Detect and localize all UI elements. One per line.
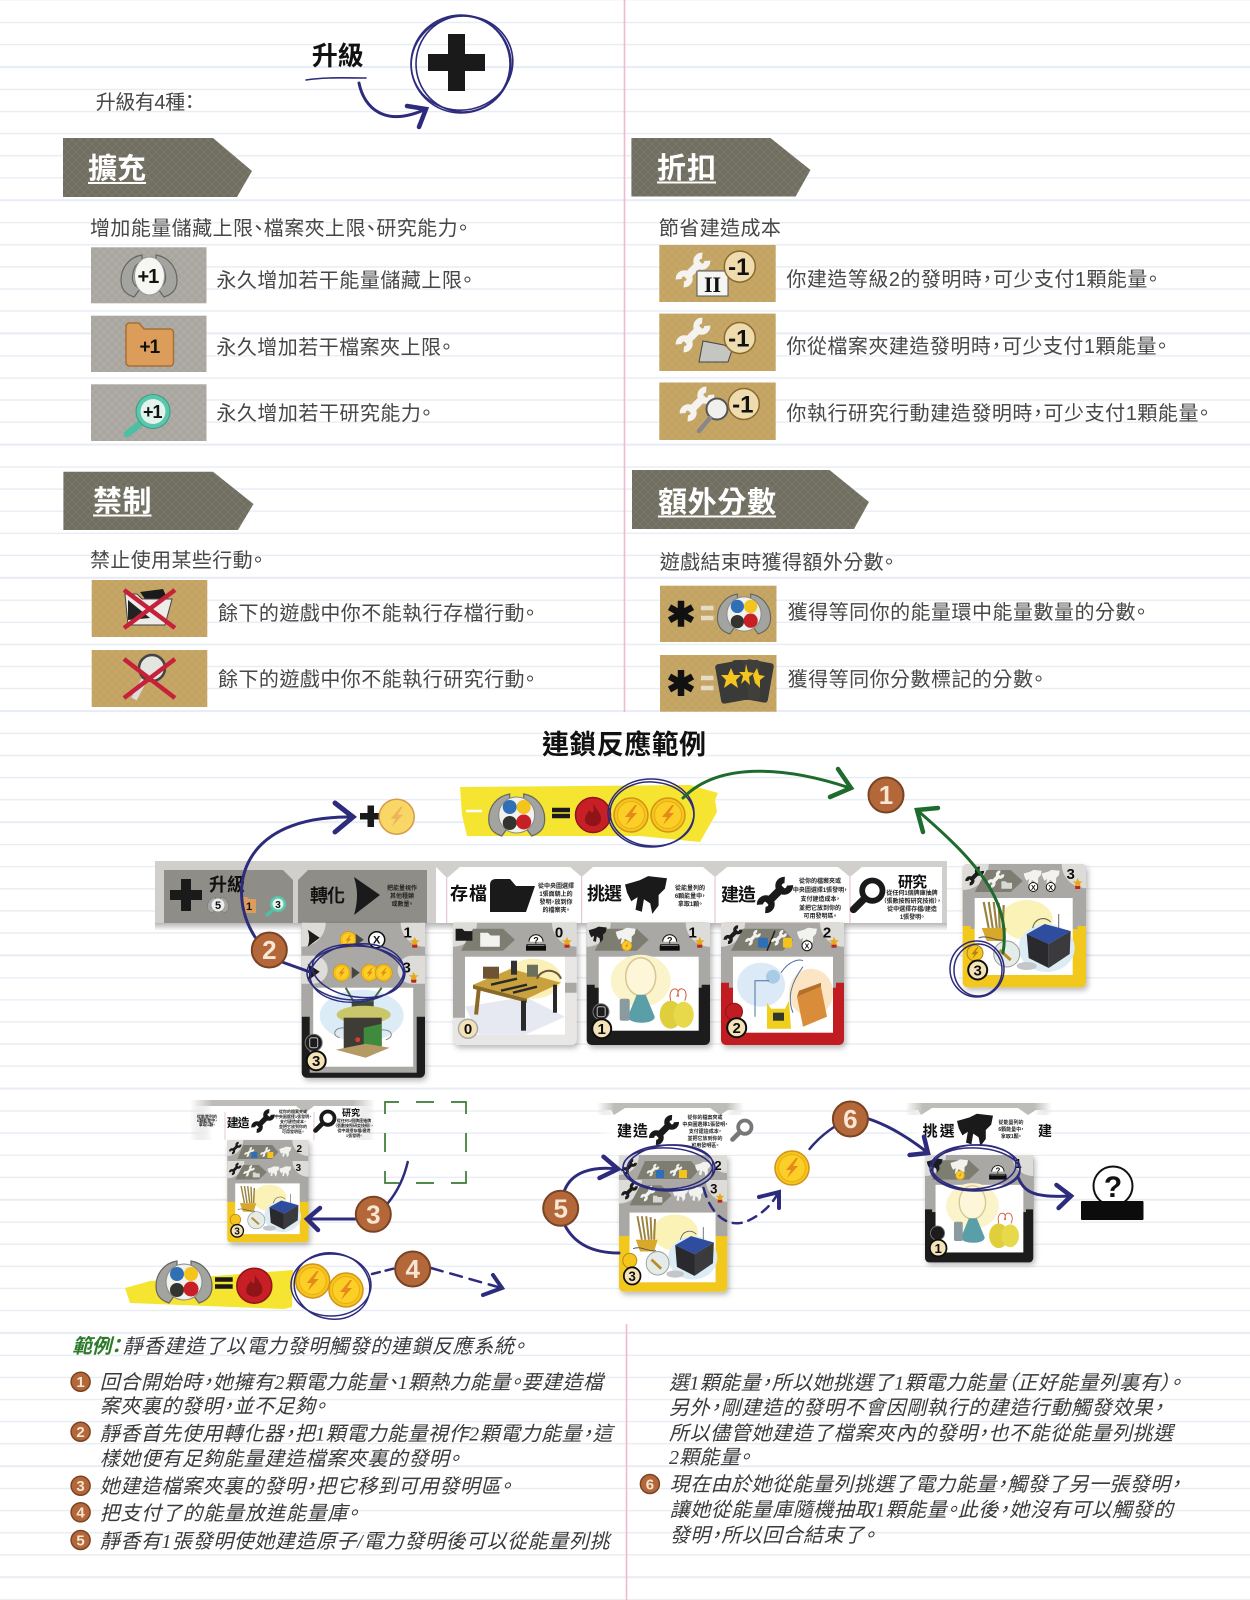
heading banner: 折扣: 折扣 [657, 152, 716, 185]
mini action strip: 挑選: 6顆能量中， [998, 1126, 1024, 1133]
heading banner: 禁制: 禁制 [93, 485, 152, 518]
icon: archive +1 [91, 316, 206, 372]
icon: research +1: +1 [143, 402, 163, 422]
action: 升級: 5 [215, 900, 221, 912]
example text: left column [71, 1335, 616, 1553]
card: bulb: 1 [689, 925, 697, 942]
card: yellow invention (right) [963, 864, 1086, 987]
page margin line (top) [624, 0, 626, 712]
step 6: 讓她從能量庫隨機抽取1顆能量。此後，她沒有可以觸發的 [670, 1500, 1175, 1522]
picked electric coin [775, 1151, 809, 1185]
mini action strip: 建造: 建造 [617, 1122, 648, 1140]
hand-drawn circle on pick row [930, 1142, 1021, 1192]
electric energy coins [614, 798, 685, 832]
mini action strip: 建造: 並把它放到你的 [687, 1135, 723, 1142]
step 3: 3 [76, 1478, 85, 1495]
description: 節省建造成本 [659, 217, 781, 240]
card: heat invention: X [805, 944, 810, 951]
icon: random energy from bank [1081, 1166, 1144, 1220]
icon: archive +1: +1 [140, 337, 161, 358]
action: 研究: 1張發明。 [900, 913, 924, 921]
spent electric coins [296, 1264, 363, 1307]
mini card stack [227, 1140, 308, 1242]
number 6 coin with arrows: 6 [843, 1104, 858, 1134]
white action panels [436, 867, 942, 923]
step 6: 現在由於她從能量列挑選了電力能量，觸發了另一張發明， [670, 1474, 1181, 1496]
step 5: 5 [76, 1532, 85, 1550]
mini action strip: 挑選: 拿取1顆。 [1001, 1133, 1021, 1140]
text: energy ring bonus: 獲得等同你的能量環中能量數量的分數。 [788, 601, 1146, 624]
build row of card: 2 [714, 1158, 722, 1173]
panel: 額外分數 [632, 470, 1146, 712]
card: heat invention [721, 923, 844, 1045]
text: level 2 discount: 你建造等級2的發明時，可少支付1顆能量。 [786, 268, 1158, 291]
action: 建造: 中央圖選擇1張發明， [793, 886, 847, 894]
text: research discount: 你執行研究行動建造發明時，可少支付1顆能量。 [786, 402, 1209, 425]
intro line: 範例： [72, 1335, 122, 1358]
action: 建造: 從你的檔案夾或 [799, 877, 841, 885]
action: 研究: 研究 [898, 873, 927, 891]
action: 挑選: 6顆能量中， [675, 892, 705, 900]
yellow highlight with energy ring: after payment [125, 1246, 376, 1326]
description: 禁止使用某些行動。 [90, 549, 263, 572]
equals sign [552, 810, 570, 816]
mini action strip: 建造 研究: 拿取1顆。 [199, 1121, 215, 1127]
heading banner: 折扣 [631, 138, 810, 196]
green arrow: card cost to step 1 [917, 808, 1004, 953]
stacked cards with build row [619, 1155, 727, 1292]
hand-drawn circle on build row [622, 1142, 715, 1192]
action: 轉化: 或數量。 [391, 900, 413, 908]
mini action strip: 建造 研究: 並把它放到你的 [279, 1123, 307, 1129]
step 2: 2 [76, 1424, 85, 1441]
number 3 coin with arrows [307, 1162, 408, 1232]
icon: black plus [428, 34, 485, 91]
icon: archive discount: -1 [728, 326, 749, 352]
action: 挑選: 挑選 [587, 884, 622, 904]
number 2 coin with pointer: 2 [262, 935, 277, 965]
icon: energy storage +1: +1 [138, 266, 159, 288]
page margin line (bottom) [626, 1324, 628, 1600]
card: bulb [587, 923, 710, 1045]
mini action strip: 建造 研究: 研究 [342, 1107, 360, 1118]
mini action strip: 建造 研究: 從能量列的 [197, 1113, 217, 1119]
step 5 continued: 所以儘管她建造了檔案夾內的發明，也不能從能量列挑選 [669, 1423, 1176, 1445]
number 5 coin with arrows [543, 1157, 619, 1253]
heading: 升級: 升級 [312, 41, 364, 71]
yellow card with free-pick [619, 1180, 727, 1292]
action: 建造 [721, 877, 847, 920]
card: workbench [453, 923, 577, 1045]
text: banned archive: 餘下的遊戲中你不能執行存檔行動。 [218, 602, 535, 625]
number 6 coin with arrows [810, 1102, 928, 1155]
number 3 coin with arrows: 3 [366, 1200, 381, 1230]
mini action strip: 建造 研究: 建造 [227, 1115, 250, 1130]
number 1 coin [868, 778, 904, 812]
icon: archive discount [659, 314, 776, 371]
card: yellow invention (right): 3 [974, 962, 982, 980]
step 6 [640, 1474, 1181, 1547]
number 1 coin: 1 [879, 780, 893, 810]
mini yellow card [227, 1161, 308, 1242]
dashed green placeholder [385, 1102, 466, 1183]
step 4: 4 [76, 1504, 85, 1522]
panel: 擴充 [63, 138, 472, 441]
step 5 continued: 選1顆能量，所以她挑選了1顆電力能量（正好能量列裏有）。 [669, 1372, 1182, 1394]
icon: energy ring bonus [660, 586, 776, 642]
number 4 coin with dashed arrow [372, 1252, 502, 1295]
action: 研究 [854, 873, 941, 921]
text: banned research: 餘下的遊戲中你不能執行研究行動。 [218, 668, 535, 691]
mini action strip: 建造: 中央圖選擇1張發明， [682, 1121, 728, 1128]
step 2: 靜香首先使用轉化器，把1顆電力能量視作2顆電力能量，這 [100, 1422, 616, 1446]
step 6: 發明，所以回合結束了。 [670, 1525, 876, 1547]
action: 挑選 [587, 876, 705, 914]
card: heat invention: 2 [823, 925, 831, 942]
card: converter stack [302, 923, 425, 1078]
mini action strip: 建造 [597, 1103, 752, 1155]
step 5 continued [669, 1372, 1182, 1469]
step 5 continued: 另外，剛建造的發明不會因剛執行的建造行動觸發效果， [669, 1398, 1163, 1420]
step 4: 把支付了的能量放進能量庫。 [100, 1503, 359, 1525]
mini action strip: 建造: 可用發明區。 [691, 1142, 719, 1149]
action: 轉化: 把能量視作 [387, 884, 417, 892]
step 2 [71, 1422, 616, 1470]
panel: 折扣 [631, 138, 1209, 440]
mini card top row: 2 [297, 1144, 303, 1155]
action: 升級: 3 [275, 900, 281, 911]
hand-drawn circle on card cost [950, 941, 1004, 997]
icon: level 2 discount: II [704, 272, 721, 297]
step 1 [71, 1372, 606, 1418]
bulb card with pick row: 1 [935, 1241, 942, 1256]
step 3: 她建造檔案夾裏的發明，把它移到可用發明區。 [100, 1476, 512, 1498]
example text: right column [640, 1372, 1182, 1547]
heat energy coin [576, 798, 610, 832]
action: 研究: 從任何1個牌庫抽牌 [886, 889, 938, 897]
mini action strip: 建造 研究: 6顆能量中， [197, 1117, 217, 1123]
step 5: 靜香有1張發明使她建造原子/電力發明後可以從能量列挑 [100, 1531, 613, 1553]
text: research: 永久增加若干研究能力。 [216, 402, 431, 425]
description: 增加能量儲藏上限、檔案夾上限、研究能力。 [90, 217, 468, 240]
action: 建造: 建造 [721, 885, 756, 905]
text: energy storage: 永久增加若干能量儲藏上限。 [216, 269, 472, 292]
bulb card with pick row: 1 [1014, 1156, 1022, 1171]
card: yellow invention (right): X [1048, 885, 1053, 892]
hand-drawn circle around coins [608, 779, 696, 849]
mini action strip: 建造 研究: 從任何1個牌庫抽牌 [337, 1117, 371, 1123]
action board strip [155, 861, 947, 931]
action: 轉化: 其他種類 [390, 892, 414, 900]
hand-drawn circle around plus [402, 6, 522, 120]
action: 研究: （張數按照研究技術）， [883, 897, 941, 905]
step 1: 回合開始時，她擁有2顆電力能量、1顆熱力能量。要建造檔 [100, 1372, 606, 1394]
mini yellow card: 3 [296, 1163, 302, 1174]
text: archive discount: 你從檔案夾建造發明時，可少支付1顆能量。 [786, 335, 1167, 358]
number 4 coin with dashed arrow: 4 [405, 1254, 420, 1284]
icon: banned research [92, 650, 207, 707]
intro text: 升級有4種： [96, 91, 195, 114]
icon: research discount: -1 [732, 392, 753, 418]
mini action strip: 建造: 支付建造成本， [689, 1128, 721, 1135]
card: workbench: 0 [555, 925, 563, 942]
mini action strip: 建造: 從你的檔案夾或 [687, 1114, 723, 1121]
step 1: 案夾裏的發明，並不足夠。 [100, 1396, 326, 1418]
yellow card with free-pick: 3 [629, 1269, 636, 1284]
card: yellow invention (right): 3 [1067, 866, 1075, 883]
number 5 coin with arrows: 5 [553, 1194, 568, 1224]
bulb card with pick row [925, 1155, 1033, 1262]
action: 存檔: 1張面朝上的 [539, 890, 573, 898]
action: 建造: 可用發明區。 [803, 912, 837, 920]
card: converter stack: 1 [404, 925, 412, 942]
step 2: 樣她便有足夠能量建造檔案夾裏的發明。 [100, 1448, 461, 1470]
heading banner: 擴充: 擴充 [88, 152, 146, 186]
text: score tokens bonus: 獲得等同你分數標記的分數。 [788, 668, 1044, 691]
green arrow: coins to step 1 [683, 769, 851, 798]
action: 挑選: 從能量列的 [675, 884, 705, 892]
mini action strip: 建造 研究: 支付建造成本， [280, 1118, 306, 1124]
text: archive: 永久增加若干檔案夾上限。 [216, 336, 451, 359]
section title: 連鎖反應範例: 連鎖反應範例 [542, 729, 706, 760]
card: bulb: ? [667, 936, 672, 946]
card: workbench: 0 [464, 1021, 472, 1038]
card: workbench: ? [533, 936, 539, 946]
card: converter stack: X [373, 935, 381, 947]
arrow from heading to plus [306, 78, 426, 127]
intro line: 靜香建造了以電力發明觸發的連鎖反應系統。 [123, 1335, 525, 1358]
icon: level 2 discount: -1 [728, 254, 749, 281]
mini action strip: 挑選: 從能量列的 [998, 1119, 1024, 1126]
yellow highlight with energy ring: start of turn [460, 779, 718, 849]
upgrade title with circled plus icon [306, 6, 522, 127]
light energy coin [379, 799, 414, 834]
action: 建造: 支付建造成本， [800, 895, 840, 903]
action: 存檔: 從中央圖選擇 [538, 882, 574, 890]
panel: 禁制 [63, 472, 535, 707]
yellow card with free-pick: 3 [710, 1181, 717, 1197]
icon: research +1 [91, 384, 206, 441]
action: 存檔: 存檔 [450, 884, 487, 904]
action: 研究: 從中選擇存檔/建造 [887, 905, 937, 913]
heading banner: 額外分數 [632, 470, 869, 529]
icon: energy storage +1 [91, 247, 206, 303]
action: 建造: 並把它放到你的 [799, 904, 841, 912]
action: 存檔: 發明，放到你 [539, 898, 573, 906]
icon: score tokens bonus [660, 655, 776, 712]
step 1: 1 [76, 1374, 85, 1391]
icon: energy ring [489, 794, 545, 836]
description: 遊戲結束時獲得額外分數。 [660, 551, 894, 574]
dashed arrow: card to energy coin [704, 1188, 779, 1223]
heading banner: 禁制 [63, 472, 254, 530]
mini action strip: 建造 研究: 從你的檔案夾或 [279, 1108, 307, 1114]
plus sign [360, 806, 382, 827]
action: 存檔 [450, 879, 574, 914]
mini action strip: 挑選: 挑選 [923, 1123, 955, 1140]
icon: energy ring [156, 1261, 212, 1303]
mini action strip: 挑選 [906, 1103, 1052, 1155]
card: bulb: 1 [598, 1021, 606, 1038]
heading banner: 擴充 [63, 138, 252, 197]
card: heat invention: 2 [733, 1020, 741, 1037]
mini yellow card: 3 [234, 1226, 240, 1237]
icon: random energy from bank: ? [1104, 1171, 1122, 1204]
heading banner: 額外分數: 額外分數 [658, 486, 776, 519]
icon: research discount [659, 382, 776, 440]
number 2 coin with pointer [252, 932, 310, 972]
equals sign [215, 1280, 233, 1286]
step 6: 6 [646, 1476, 654, 1494]
mini action strip: 建造 研究: （張數按照研究技術）， [335, 1122, 373, 1128]
action: 升級: 1 [246, 901, 252, 913]
action: 轉化: 轉化 [310, 886, 345, 906]
hand-drawn circle on converter row [307, 939, 407, 1007]
step 5 continued: 2顆能量。 [669, 1447, 751, 1469]
card: yellow invention (right): X [1031, 885, 1036, 892]
icon: banned archive [92, 580, 207, 637]
arrow: pick row to random draw [1018, 1177, 1071, 1208]
heat energy coin [237, 1268, 272, 1303]
action: 升級 [164, 870, 293, 923]
mini action strip: 建造 研究 [190, 1100, 375, 1140]
converter gain: plus and coin [360, 799, 414, 834]
arrow: step 2 to coin gain [242, 803, 353, 937]
mini action strip: 建造 研究: 可用發明區。 [282, 1128, 304, 1134]
bulb card with pick row: ? [995, 1166, 1000, 1175]
mini action strip: 建造 研究: 中央圖選擇1張發明， [275, 1113, 311, 1119]
action: 轉化 [298, 870, 427, 923]
hand-drawn circle around spent coins [288, 1246, 376, 1326]
card: converter stack: 3 [403, 960, 411, 977]
action: 升級: 升級 [209, 874, 245, 895]
card: converter stack: 3 [312, 1053, 320, 1070]
mini action strip: 建造 研究: 1張發明。 [346, 1132, 362, 1138]
mini action strip: 挑選: 建 [1038, 1123, 1052, 1139]
action: 挑選: 拿取1顆。 [678, 900, 702, 908]
mini action strip: 建造 研究: 從中選擇存檔/建造 [337, 1127, 371, 1133]
icon: level 2 discount [659, 245, 776, 302]
action: 存檔: 的檔案夾。 [542, 906, 570, 914]
